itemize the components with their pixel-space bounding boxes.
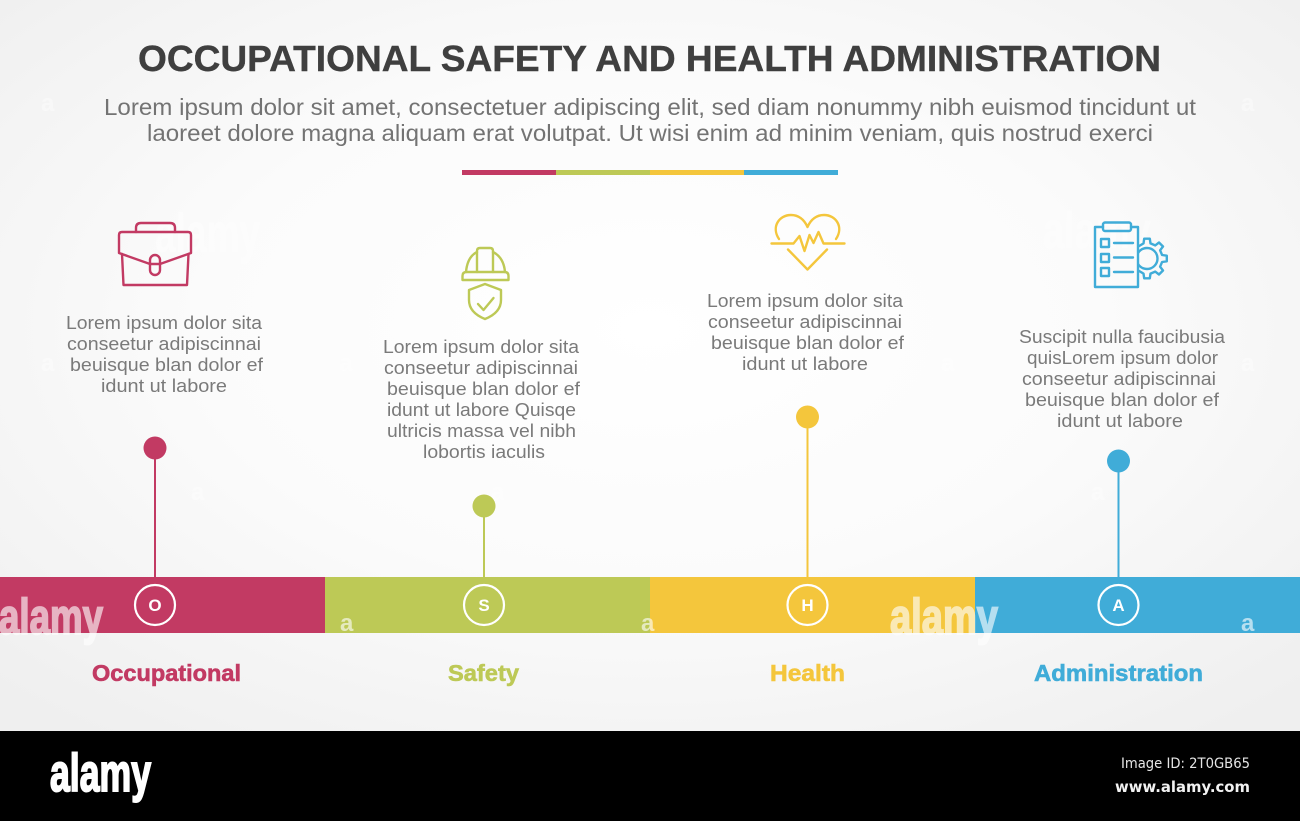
bar watermarks xyxy=(0,589,1255,645)
badge: H: H xyxy=(801,596,814,615)
description: conseetur adipiscinnai xyxy=(384,358,578,378)
footer bar xyxy=(0,731,1300,821)
intro text: Lorem ipsum dolor sit amet, consectetuer adipiscing elit, sed diam nonummy nibh euismod tincidunt ut xyxy=(104,94,1196,120)
faint watermarks: a xyxy=(491,479,505,506)
bar watermarks: a xyxy=(641,610,655,637)
bar watermarks: a xyxy=(340,610,354,637)
label: Occupational: Occupational xyxy=(92,660,241,686)
pin xyxy=(796,406,819,578)
segmented colour bar xyxy=(0,577,1300,633)
description: conseetur adipiscinnai xyxy=(1022,369,1216,389)
badge: O xyxy=(135,585,175,625)
description: conseetur adipiscinnai xyxy=(67,334,261,354)
faint watermarks: a xyxy=(641,350,655,377)
faint watermarks: a xyxy=(191,479,205,506)
description: Lorem ipsum dolor sita xyxy=(707,291,904,311)
description: Lorem ipsum dolor sita xyxy=(383,337,580,357)
faint watermarks: a xyxy=(41,90,55,117)
description: beuisque blan dolor ef xyxy=(387,379,581,399)
description: quisLorem ipsum dolor xyxy=(1027,348,1218,368)
description: idunt ut labore xyxy=(101,376,227,396)
image id: Image ID: 2T0GB65 xyxy=(1121,756,1250,772)
faint watermarks: alamy xyxy=(1043,202,1151,260)
faint watermarks: a xyxy=(941,350,955,377)
pin xyxy=(472,494,496,578)
description: idunt ut labore Quisqe xyxy=(387,400,576,420)
description: beuisque blan dolor ef xyxy=(1025,390,1220,410)
column: Safety xyxy=(383,248,581,578)
website: www.alamy.com xyxy=(1115,778,1250,796)
faint watermarks: a xyxy=(1091,479,1105,506)
label: Administration: Administration xyxy=(1034,660,1203,686)
faint watermarks: a xyxy=(41,350,55,377)
label: Health: Health xyxy=(770,660,845,686)
faint watermarks: a xyxy=(1241,90,1255,117)
description: Lorem ipsum dolor sita xyxy=(66,313,263,333)
badge: H xyxy=(788,585,828,625)
icon: heart with pulse xyxy=(772,215,844,270)
title: OCCUPATIONAL SAFETY AND HEALTH ADMINISTRATION xyxy=(138,38,1161,79)
pin xyxy=(1107,450,1130,578)
icon: briefcase xyxy=(119,223,191,285)
description: beuisque blan dolor ef xyxy=(70,355,264,375)
icon: helmet and shield xyxy=(462,248,508,319)
faint watermarks: a xyxy=(339,350,353,377)
description: idunt ut labore xyxy=(742,354,868,374)
faint watermarks: a xyxy=(1241,350,1255,377)
badge: A xyxy=(1098,585,1138,625)
description xyxy=(383,337,581,462)
description xyxy=(1019,327,1226,431)
description: beuisque blan dolor ef xyxy=(711,333,905,353)
label: Safety: Safety xyxy=(448,660,519,686)
faint watermarks xyxy=(41,90,1255,506)
column: Administration xyxy=(1019,222,1226,578)
colour divider xyxy=(462,170,838,175)
faint watermarks: alamy xyxy=(155,201,260,264)
intro text xyxy=(104,94,1196,146)
description xyxy=(66,313,264,396)
column: Health xyxy=(707,215,905,578)
description xyxy=(707,291,905,374)
description: conseetur adipiscinnai xyxy=(708,312,902,332)
bar watermarks: a xyxy=(1241,610,1255,637)
intro text: laoreet dolore magna aliquam erat volutpat. Ut wisi enim ad minim veniam, quis nostrud exerci xyxy=(147,120,1153,146)
bar watermarks: alamy xyxy=(0,589,103,645)
badge: S: S xyxy=(478,596,490,615)
badge: O: O xyxy=(148,596,162,615)
description: idunt ut labore xyxy=(1057,411,1183,431)
icon: clipboard and gear xyxy=(1095,222,1167,287)
footer logo: alamy xyxy=(50,744,151,803)
badge: S xyxy=(464,585,504,625)
bar watermarks: alamy xyxy=(890,589,998,645)
description: ultricis massa vel nibh xyxy=(387,421,576,441)
description: Suscipit nulla faucibusia xyxy=(1019,327,1226,347)
column: Occupational xyxy=(66,223,264,578)
pin xyxy=(144,436,166,578)
description: lobortis iaculis xyxy=(423,442,545,462)
badge: A: A xyxy=(1112,596,1125,615)
